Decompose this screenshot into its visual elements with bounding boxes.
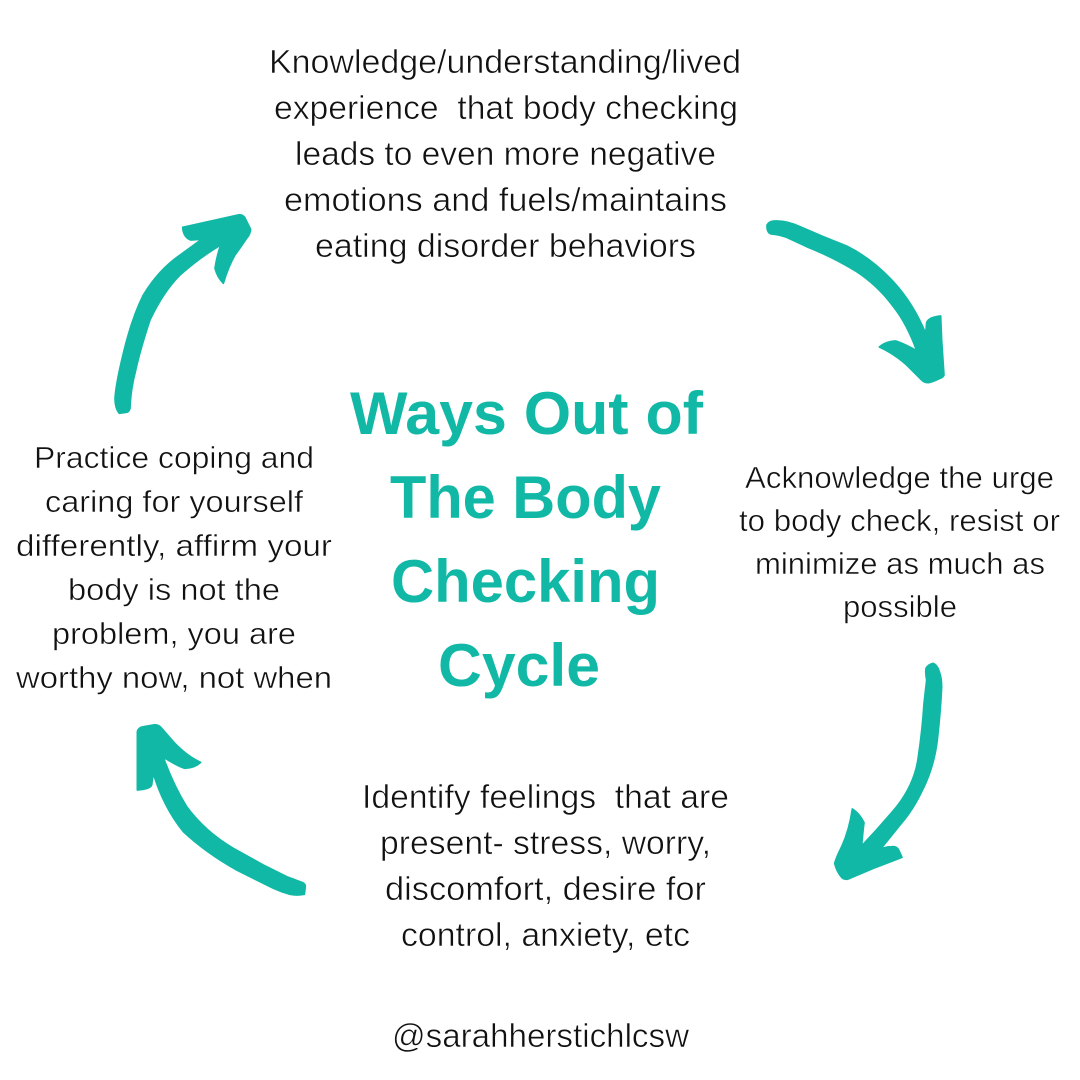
text block: left step: worthy now, not when xyxy=(15,660,332,695)
text block: top step: leads to even more negative xyxy=(295,135,716,172)
text block: bottom step: present- stress, worry, xyxy=(380,824,711,861)
text block: bottom step: Identify feelings that are xyxy=(362,778,729,815)
title xyxy=(350,380,704,699)
text block: top step: eating disorder behaviors xyxy=(315,227,696,264)
arrow: bottom to left xyxy=(137,725,305,895)
text block: top step xyxy=(269,43,741,264)
arrow: left to top xyxy=(115,215,251,413)
text block: left step: body is not the xyxy=(68,572,280,607)
text block: right step xyxy=(739,460,1060,624)
text block: left step: differently, affirm your xyxy=(16,528,332,563)
text block: left step xyxy=(15,440,332,695)
text block: bottom step: control, anxiety, etc xyxy=(401,916,690,953)
text block: right step: Acknowledge the urge xyxy=(745,460,1054,495)
text block: top step: experience that body checking xyxy=(274,89,738,126)
text block: bottom step: discomfort, desire for xyxy=(385,870,706,907)
title: Checking xyxy=(391,548,660,615)
text block: top step: Knowledge/understanding/lived xyxy=(269,43,741,80)
handle: @sarahherstichlcsw xyxy=(392,1017,689,1054)
text block: bottom step xyxy=(362,778,729,953)
text block: left step: caring for yourself xyxy=(45,484,303,519)
text block: left step: problem, you are xyxy=(52,616,296,651)
text block: top step: emotions and fuels/maintains xyxy=(284,181,727,218)
title: The Body xyxy=(390,464,662,531)
title: Cycle xyxy=(438,632,600,699)
text block: right step: to body check, resist or xyxy=(739,503,1060,538)
title: Ways Out of xyxy=(350,380,704,447)
text block: right step: minimize as much as xyxy=(755,546,1045,581)
text block: left step: Practice coping and xyxy=(34,440,314,475)
arrow: right to bottom xyxy=(835,663,942,879)
arrow: top to right xyxy=(767,221,944,383)
text block: right step: possible xyxy=(843,589,957,624)
